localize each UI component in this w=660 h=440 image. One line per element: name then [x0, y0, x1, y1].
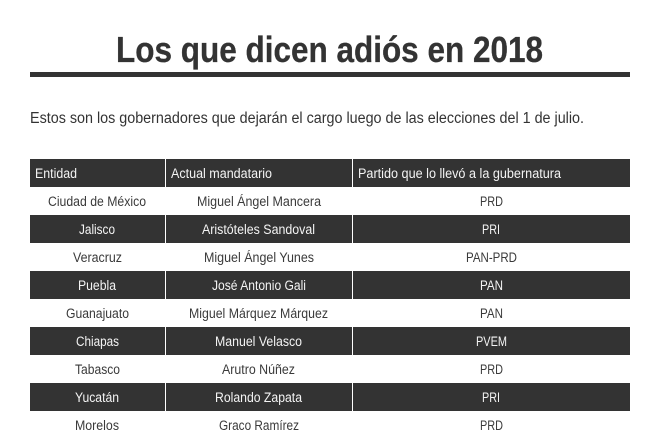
row: Puebla: Puebla	[78, 278, 116, 293]
table header row: Actual mandatario	[171, 166, 272, 181]
row: Tabasco: Tabasco	[75, 362, 120, 377]
title: Los que dicen adiós en 2018	[116, 29, 543, 70]
row: Yucatán: Yucatán	[75, 390, 119, 405]
row: Puebla: PAN	[480, 278, 503, 293]
row: Morelos	[75, 418, 503, 433]
row: Jalisco: PRI	[482, 222, 500, 237]
row: Yucatán: Rolando Zapata	[215, 390, 302, 405]
row: Guanajuato: Guanajuato	[66, 306, 129, 321]
row: Yucatán	[30, 383, 630, 411]
row: Tabasco	[75, 362, 503, 377]
row: Ciudad de México	[48, 194, 503, 209]
row: Veracruz	[73, 250, 517, 265]
row: Guanajuato	[66, 306, 503, 321]
row: Chiapas: PVEM	[476, 334, 507, 349]
row: Morelos: Graco Ramírez	[219, 418, 299, 433]
table header row: Entidad	[35, 166, 77, 181]
row: Guanajuato: PAN	[480, 306, 503, 321]
row: Ciudad de México: Miguel Ángel Mancera	[197, 194, 321, 209]
row: Jalisco: Aristóteles Sandoval	[202, 222, 315, 237]
table: governors	[30, 159, 630, 433]
row: Ciudad de México: PRD	[480, 194, 503, 209]
row: Guanajuato: Miguel Márquez Márquez	[189, 306, 328, 321]
intro text: Estos son los gobernadores que dejarán el cargo luego de las elecciones del 1 de julio.	[30, 110, 584, 127]
row: Chiapas: Manuel Velasco	[215, 334, 302, 349]
row: Morelos: PRD	[480, 418, 503, 433]
row: Ciudad de México: Ciudad de México	[48, 194, 146, 209]
row: Yucatán: PRI	[482, 390, 500, 405]
title underline rule	[30, 72, 630, 77]
row: Jalisco: Jalisco	[79, 222, 115, 237]
table header row	[30, 159, 630, 187]
row: Puebla	[30, 271, 630, 299]
row: Veracruz: Miguel Ángel Yunes	[204, 250, 314, 265]
row: Morelos: Morelos	[75, 418, 119, 433]
row: Puebla: José Antonio Gali	[212, 278, 306, 293]
row: Jalisco	[30, 215, 630, 243]
row: Veracruz: PAN-PRD	[466, 250, 517, 265]
row: Tabasco: Arutro Núñez	[222, 362, 295, 377]
row: Chiapas: Chiapas	[76, 334, 119, 349]
table header row: Partido que lo llevó a la gubernatura	[358, 166, 561, 181]
row: Chiapas	[30, 327, 630, 355]
row: Veracruz: Veracruz	[73, 250, 122, 265]
row: Tabasco: PRD	[480, 362, 503, 377]
